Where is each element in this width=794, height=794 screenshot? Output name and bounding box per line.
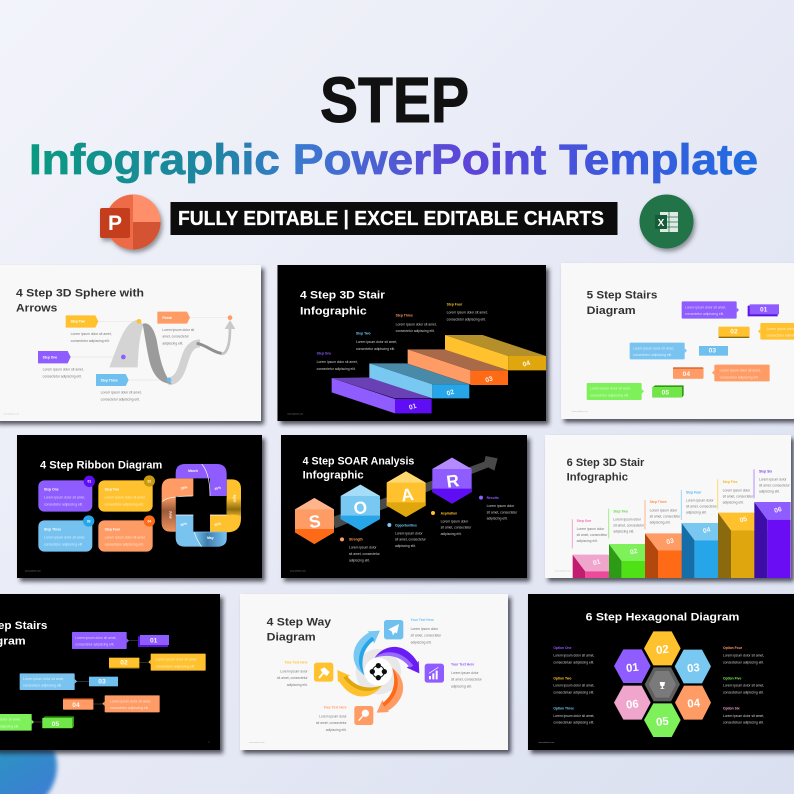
step 03: Lorem ipsum dolor sit amet, <box>23 677 64 681</box>
ribbon cross chart: June <box>168 511 172 519</box>
card: step four <box>98 515 155 552</box>
step 05 <box>587 383 684 400</box>
right options: Option Five <box>723 676 741 680</box>
footer: www.website.com <box>572 410 588 413</box>
hexagon 03 <box>675 650 711 683</box>
step labels: Step Five <box>723 480 738 484</box>
heading: 6 Step Hexagonal Diagram <box>586 611 739 623</box>
body text: adipiscing elit. <box>162 342 183 346</box>
stair 04 <box>682 523 731 578</box>
heading <box>303 456 414 482</box>
panel: 5 Step Stairs Diagram dark <box>0 620 209 744</box>
step labels <box>572 469 791 548</box>
label: results: Lorem ipsum dolor <box>487 504 515 508</box>
heading <box>16 288 144 315</box>
text: blue <box>411 618 442 644</box>
step labels: sit amet, consectetur <box>759 484 791 488</box>
ribbon cross chart <box>162 464 241 547</box>
left options: Option One <box>553 646 572 650</box>
hexagon 05: 05 <box>656 716 669 729</box>
right options: Lorem ipsum dolor sit amet, <box>723 714 764 718</box>
heading <box>0 620 47 648</box>
hexagon 03: 03 <box>687 662 700 675</box>
text: purple: sit amet, consectetur <box>451 678 483 682</box>
heading <box>567 457 645 484</box>
ribbon cross chart: 30% <box>180 522 188 527</box>
heading: 4 Step 3D Sphere with <box>16 288 144 300</box>
panel background: slide 4 <box>17 435 262 578</box>
heading: Diagram <box>267 632 316 644</box>
footer: www.website.com <box>290 570 306 573</box>
tag: step two <box>66 315 98 328</box>
step labels: Lorem ipsum dolor <box>759 478 787 482</box>
label: results: sit amet, consectetur <box>487 510 518 514</box>
label: strength: Lorem ipsum dolor <box>349 546 377 550</box>
left options: Lorem ipsum dolor sit amet, <box>553 714 594 718</box>
text: orange <box>316 706 348 732</box>
heading: 4 Step Way <box>267 617 332 629</box>
hexagon 02 <box>644 631 681 665</box>
label: opportunities: Lorem ipsum dolor <box>395 531 423 535</box>
step 03 <box>630 343 728 359</box>
label: aspiration: Aspiration <box>441 511 457 515</box>
step labels: Step Four <box>686 490 702 494</box>
hexagon 04 <box>675 686 711 720</box>
text: blue: Your Text Here <box>411 618 434 622</box>
card: step one: Lorem ipsum dolor sit amet, <box>44 496 85 500</box>
panel: 4 Step 3D Stair Infographic <box>287 290 546 415</box>
step labels: consectetur adipiscing elit. <box>356 347 395 351</box>
step 03 <box>20 673 118 690</box>
step 04 <box>63 695 160 712</box>
heading: 4 Step 3D Stair <box>300 290 386 302</box>
label: results <box>479 496 518 521</box>
step 05 <box>0 714 74 731</box>
right options: consectetuer adipiscing elit. <box>723 691 764 695</box>
footer: www.website.com <box>25 570 41 573</box>
leader lines <box>71 318 230 380</box>
step labels: adipiscing elit. <box>723 500 744 504</box>
card: step one <box>38 476 95 512</box>
stair 03: 03 <box>485 375 494 384</box>
ribbon cross chart: April <box>232 495 236 502</box>
label: aspiration: sit amet, consectetur <box>441 526 472 530</box>
left options: Option Two <box>553 676 571 680</box>
step 04: 04 <box>683 371 690 378</box>
label: results: adipiscing elit. <box>487 517 508 521</box>
label: strength: sit amet, consectetur <box>349 552 381 556</box>
stair 02: 02 <box>446 389 455 398</box>
body text: consectetur adipiscing elit. <box>71 339 110 343</box>
step labels: Lorem ipsum dolor <box>650 508 678 512</box>
label: aspiration: adipiscing elit. <box>441 532 462 536</box>
step labels: adipiscing elit. <box>577 539 598 543</box>
label: opportunities: Opportunities <box>395 523 417 527</box>
tag: step three <box>96 374 129 386</box>
step 02: Lorem ipsum dolor sit amet, <box>156 658 197 662</box>
hexagon O: O <box>352 497 368 519</box>
growth arrow <box>332 456 498 528</box>
card: step two: Lorem ipsum dolor sit amet, <box>105 496 146 500</box>
step 01: 01 <box>150 637 158 644</box>
step 04: consectetur adipiscing elit. <box>720 375 759 379</box>
stair 01 <box>573 555 621 578</box>
card: step three: consectetur adipiscing elit. <box>44 542 83 546</box>
right options: consectetuer adipiscing elit. <box>723 721 764 725</box>
hexagon 01: 01 <box>626 662 639 675</box>
text: orange: adipiscing elit. <box>326 728 347 732</box>
arrow: purple <box>375 647 419 673</box>
step 05: consectetur adipiscing elit. <box>590 393 629 397</box>
text: yellow: sit amet, consectetur <box>277 676 309 680</box>
right options <box>723 646 764 725</box>
step 02: 02 <box>730 328 738 335</box>
left options: consectetuer adipiscing elit. <box>553 660 594 664</box>
text: orange: Your Text Here <box>323 706 347 710</box>
card: step one: consectetur adipiscing elit. <box>44 502 83 506</box>
right options: consectetuer adipiscing elit. <box>723 660 764 664</box>
card: step four: consectetur adipiscing elit. <box>105 542 144 546</box>
step labels: adipiscing elit. <box>613 530 634 534</box>
step labels: consectetur adipiscing elit. <box>317 367 356 371</box>
stair 04: 04 <box>522 360 531 369</box>
hexagon R: R <box>445 470 461 492</box>
step 04 <box>673 365 770 381</box>
heading <box>300 290 386 317</box>
step labels: sit amet, consectetur <box>650 514 681 518</box>
text: orange: Lorem ipsum dolor <box>319 714 348 718</box>
label: opportunities <box>387 523 427 548</box>
step labels: Lorem ipsum dolor <box>577 527 605 531</box>
text: yellow: Your Text Here <box>284 660 308 664</box>
text: purple: adipiscing elit. <box>451 684 472 688</box>
step labels: Step Four <box>447 302 463 306</box>
markers <box>121 315 232 382</box>
step labels: sit amet, consectetur <box>723 494 754 498</box>
stair 03 <box>408 349 508 385</box>
step 01 <box>72 632 169 649</box>
hexagon 01 <box>614 649 651 683</box>
hexagon S: S <box>308 511 322 532</box>
step 01: Lorem ipsum dolor sit amet, <box>75 636 116 640</box>
body text: Lorem ipsum dolor sit amet, <box>43 367 84 371</box>
step labels: adipiscing elit. <box>650 520 671 524</box>
footer: www.website.com <box>249 741 265 744</box>
panel background: slide 1 <box>0 265 261 421</box>
heading <box>267 617 332 644</box>
right options: Lorem ipsum dolor sit amet, <box>723 654 764 658</box>
step 03: 03 <box>98 679 106 686</box>
heading: Infographic <box>300 305 367 317</box>
footer: www.website.com <box>555 569 571 572</box>
step labels: Lorem ipsum dolor sit amet, <box>356 340 397 344</box>
ribbon cross chart: March <box>188 469 198 473</box>
footer: www.website.com <box>538 741 554 744</box>
card: step two: consectetur adipiscing elit. <box>105 502 144 506</box>
icon: paper plane <box>384 620 403 639</box>
stair 06: 06 <box>774 506 783 515</box>
step 05: 05 <box>52 721 59 728</box>
step labels: sit amet, consectetur <box>686 505 718 509</box>
body text: Lorem ipsum dolor sit <box>162 328 194 332</box>
stair 03: 03 <box>666 537 675 546</box>
step 03: 03 <box>709 348 716 355</box>
arrow: blue <box>354 631 380 675</box>
step labels: Lorem ipsum dolor sit amet, <box>396 322 437 326</box>
heading: Infographic <box>567 472 628 484</box>
step 04: Lorem ipsum dolor sit amet, <box>720 369 761 373</box>
text: purple: Your Text Here <box>451 662 474 666</box>
banner: fully editable: FULLY EDITABLE | EXCEL EDITABLE CHARTS <box>178 208 604 230</box>
step labels: Lorem ipsum dolor sit amet, <box>317 360 358 364</box>
text: yellow: adipiscing elit. <box>287 683 308 687</box>
stair 01: 01 <box>408 403 418 412</box>
hexagon 02: 02 <box>656 644 669 657</box>
card: step four: 04 <box>147 519 151 523</box>
step labels: Lorem ipsum dolor <box>723 488 751 492</box>
hexagon A: A <box>400 484 415 505</box>
label: aspiration: Lorem ipsum dolor <box>441 519 469 523</box>
card: step three: Step Three <box>44 528 61 532</box>
ribbon cross chart: 35% <box>214 486 222 491</box>
card: step one: Step One <box>44 488 59 492</box>
step 03: consectetur adipiscing elit. <box>23 684 62 688</box>
text: yellow <box>277 660 309 687</box>
arrow: yellow <box>337 670 382 696</box>
heading <box>587 289 657 317</box>
hexagon R <box>432 458 472 504</box>
panel background: slide 8 <box>240 594 508 750</box>
step 01: Lorem ipsum dolor sit amet, <box>685 305 726 309</box>
left options: Lorem ipsum dolor sit amet, <box>553 684 594 688</box>
panel: 5 Step Stairs Diagram light <box>572 289 794 413</box>
text: blue: adipiscing elit. <box>411 640 432 644</box>
panel background: slide 5 <box>281 435 527 578</box>
left options: consectetuer adipiscing elit. <box>553 721 594 725</box>
label: strength: adipiscing elit. <box>349 558 370 562</box>
step 02 <box>109 654 206 671</box>
ribbon cross chart: May <box>207 536 214 540</box>
stair 01 <box>332 377 432 413</box>
step labels: Lorem ipsum dolor <box>613 518 642 522</box>
body text: consectetur adipiscing elit. <box>101 397 140 401</box>
step 03: consectetur adipiscing elit. <box>633 353 672 357</box>
heading: Arrows <box>16 303 57 315</box>
step labels: sit amet, consectetur <box>613 524 645 528</box>
panel background: slide 3 <box>561 263 794 419</box>
step 02: consectetur adipiscing elit. <box>156 664 195 668</box>
stair 02: 02 <box>629 548 639 556</box>
card: step two: Step Two <box>105 488 119 492</box>
body text <box>43 328 194 401</box>
step labels <box>317 302 488 371</box>
label: results: Results <box>487 496 499 500</box>
label: strength: Strength <box>349 538 363 542</box>
hexagon O <box>341 485 380 530</box>
icon: Excel logo: X <box>658 218 665 229</box>
decorative blue blob bottom left <box>0 716 57 794</box>
heading: 4 Step SOAR Analysis <box>303 456 414 468</box>
tag: step one: Step One <box>43 355 57 359</box>
card: step two <box>98 475 155 512</box>
step 05: 05 <box>662 390 669 397</box>
step labels: sit amet, consectetur <box>577 533 608 537</box>
footer: www.website.com <box>3 412 19 415</box>
left options <box>553 646 594 725</box>
grey pinwheel backing <box>356 649 401 694</box>
right options: Lorem ipsum dolor sit amet, <box>723 684 764 688</box>
step labels: Step Three <box>650 500 667 504</box>
panel: 6 Step Hexagonal Diagram <box>538 611 764 744</box>
step labels: adipiscing elit. <box>759 490 780 494</box>
step 01: 01 <box>760 306 768 313</box>
step 05: Lorem ipsum dolor sit amet, <box>590 387 631 391</box>
icon: magnifier <box>354 706 373 725</box>
stair 05 <box>718 513 767 578</box>
hexagon 06 <box>614 686 651 720</box>
step labels: Step One <box>577 519 591 523</box>
label: strength <box>340 537 381 562</box>
step labels: Lorem ipsum dolor sit amet, <box>447 311 488 315</box>
step labels: Step Six <box>759 470 772 474</box>
card: step three: 03 <box>87 519 91 523</box>
hexagon 04: 04 <box>687 697 701 711</box>
panel: 6 Step 3D Stair Infographic <box>555 457 791 578</box>
ribbon arrow <box>109 319 235 384</box>
card: step three <box>38 515 94 552</box>
step labels: Step One <box>317 352 331 356</box>
subtitle: Infographic PowerPoint Template: Infographic PowerPoint Template <box>29 136 758 184</box>
right options: Option Six <box>723 707 740 711</box>
stair 05: 05 <box>739 516 748 524</box>
step 04: Lorem ipsum dolor sit amet, <box>110 699 151 703</box>
tag: step three: Step Three <box>101 378 118 382</box>
heading: Infographic <box>303 470 364 482</box>
step labels: Lorem ipsum dolor <box>686 499 714 503</box>
banner: fully editable <box>170 202 618 235</box>
icon: pin <box>314 663 333 682</box>
stair 04: 04 <box>702 526 712 535</box>
hexagon 05 <box>644 703 681 737</box>
step labels: Step Two <box>356 332 371 336</box>
connectors <box>32 641 151 722</box>
stair 01: 01 <box>592 558 602 567</box>
step labels: Step Three <box>396 314 413 318</box>
label: aspiration <box>431 511 472 536</box>
step 04: consectetur adipiscing elit. <box>110 706 149 710</box>
panel: 4 Step SOAR Analysis Infographic <box>290 456 518 573</box>
icon: PowerPoint logo: P <box>108 212 122 235</box>
panel background: slide 7 <box>0 594 220 750</box>
icon: bar chart <box>425 664 444 683</box>
card: step three: Lorem ipsum dolor sit amet, <box>44 536 85 540</box>
stair 04 <box>445 335 546 370</box>
footer: www.website.com <box>287 412 303 415</box>
step labels: Step Two <box>613 510 628 514</box>
body text: Lorem ipsum dolor sit amet, <box>101 390 142 394</box>
text: purple: Lorem ipsum dolor <box>451 671 479 675</box>
panel: 4 Step Ribbon Diagram <box>25 459 241 573</box>
hexagon A <box>387 471 426 517</box>
text: blue: Lorem ipsum dolor <box>411 627 439 631</box>
panel: 4 Step Way Diagram <box>249 617 483 744</box>
card: step four: Step Four <box>105 528 121 532</box>
stair 06 <box>754 502 791 578</box>
card: step four: Lorem ipsum dolor sit amet, <box>105 536 146 540</box>
center hub icon <box>364 658 392 686</box>
label: opportunities: sit amet, consectetur <box>395 538 427 542</box>
panel background: slide 6 <box>545 435 791 578</box>
heading: 5 Step Stairs <box>587 289 657 301</box>
text: orange: sit amet, consectetur <box>316 721 348 725</box>
card: step two: 02 <box>147 479 151 483</box>
step 04: 04 <box>72 702 80 709</box>
tag: step two: Step Two <box>71 320 85 324</box>
label: opportunities: adipiscing elit. <box>395 544 416 548</box>
title: STEP: STEP <box>320 64 469 136</box>
left options: Lorem ipsum dolor sit amet, <box>553 654 594 658</box>
ribbon cross chart: 30% <box>214 522 222 527</box>
page number: 7 <box>208 742 209 744</box>
body text: amet, consectetur <box>162 335 190 339</box>
card: step one: 01 <box>87 480 91 484</box>
text: yellow: Lorem ipsum dolor <box>280 669 309 673</box>
step 02 <box>719 323 794 340</box>
stair 02 <box>369 363 469 398</box>
ribbon cross chart: 35% <box>180 485 188 491</box>
heading: 6 Step 3D Stair <box>567 457 645 469</box>
icon: PowerPoint logo <box>100 194 160 250</box>
text: purple <box>451 662 483 688</box>
center hexagon with trophy <box>645 667 680 701</box>
arrow: orange <box>377 668 403 713</box>
icon: Excel logo <box>640 194 694 248</box>
step labels: adipiscing elit. <box>686 511 707 515</box>
heading: 4 Step Ribbon Diagram <box>40 459 162 471</box>
step 01: consectetur adipiscing elit. <box>75 643 114 647</box>
step 01: consectetur adipiscing elit. <box>685 312 724 316</box>
step 01 <box>682 301 779 319</box>
step 02: 02 <box>120 659 128 666</box>
hexagon S <box>295 498 334 544</box>
panel background: slide 2 <box>278 265 546 421</box>
left options: Option Three <box>553 707 574 711</box>
panel: 4 Step 3D Sphere with Arrows <box>3 288 235 415</box>
stair 03 <box>645 533 694 578</box>
step 03: Lorem ipsum dolor sit amet, <box>633 346 674 350</box>
heading: Diagram <box>587 305 636 317</box>
body text: Lorem ipsum dolor sit amet, <box>71 332 112 336</box>
body text: consectetur adipiscing elit. <box>43 374 82 378</box>
step labels: consectetur adipiscing elit. <box>447 318 486 322</box>
tag: finish <box>157 312 190 324</box>
hexagon 06: 06 <box>626 698 639 712</box>
step labels: consectetur adipiscing elit. <box>396 329 435 333</box>
panel background: slide 9 <box>528 594 794 750</box>
tag: step one <box>38 351 71 363</box>
stair 02 <box>609 544 658 578</box>
text: blue: sit amet, consectetur <box>411 634 442 638</box>
tag: finish: Finish <box>162 316 172 320</box>
left options: consectetuer adipiscing elit. <box>553 691 594 695</box>
right options: Option Four <box>723 646 743 650</box>
